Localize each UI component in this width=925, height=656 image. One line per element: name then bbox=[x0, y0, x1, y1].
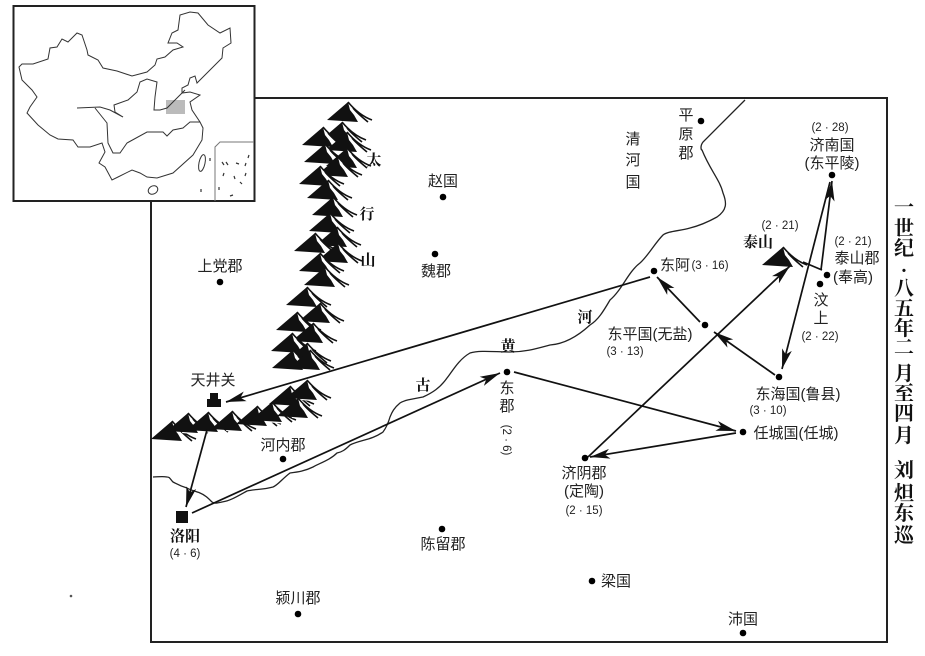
side title: 纪 bbox=[894, 237, 914, 260]
side title: 月 bbox=[894, 424, 914, 447]
place: Mount Tai bbox=[743, 220, 799, 251]
place: Wei bbox=[421, 251, 451, 280]
place: Dongjun: 郡 bbox=[499, 398, 515, 415]
place: Henei bbox=[260, 437, 306, 462]
mountain label: Taihang: 山 bbox=[360, 252, 376, 269]
place: Pei: 沛国 bbox=[728, 611, 758, 628]
arrow: Jiyin to Taishan bbox=[588, 266, 790, 457]
place: Dongjun bbox=[499, 369, 515, 456]
South China Sea islands bbox=[201, 155, 249, 196]
river label: ancient Yellow River: 黄 bbox=[500, 337, 517, 355]
mountain range: Taihang bbox=[271, 102, 372, 372]
mountain: Taishan bbox=[762, 247, 807, 269]
place: Mount Tai: (2 · 21) bbox=[761, 220, 799, 232]
side title: 世 bbox=[894, 217, 914, 240]
place: Dong'e: (3 · 16) bbox=[691, 260, 729, 272]
place: Qinghe bbox=[625, 131, 641, 191]
arrow: Tianjing Pass to Luoyang bbox=[186, 430, 207, 507]
side title: 二 bbox=[894, 337, 914, 359]
arrow: Wenshang to Jinan bbox=[821, 181, 832, 270]
place: Jinan: 济南国 bbox=[809, 137, 855, 154]
place: Qinghe: 国 bbox=[625, 174, 641, 191]
place: Wenshang bbox=[801, 281, 839, 343]
mountain range: southern Taihang bbox=[151, 380, 331, 443]
place: Taishan Commandery: (奉高) bbox=[833, 268, 873, 286]
river label: ancient Yellow River: 河 bbox=[577, 309, 593, 326]
place: Jiyin: 济阴郡 bbox=[561, 465, 607, 482]
place: Dongping bbox=[606, 322, 708, 358]
place: Yingchuan bbox=[275, 590, 321, 617]
place: Wenshang: 上 bbox=[813, 310, 829, 327]
side title: 五 bbox=[894, 298, 914, 320]
place: Pingyuan bbox=[678, 107, 704, 162]
place: Dongjun: (2 · 6) bbox=[500, 425, 512, 456]
side title: 年 bbox=[894, 316, 914, 340]
place: Henei: 河内郡 bbox=[260, 437, 306, 454]
arrow: Dongping to Dong'e bbox=[657, 277, 700, 322]
river label: ancient Yellow River bbox=[415, 309, 593, 394]
place: Dongping: 东平国(无盐) bbox=[608, 326, 692, 343]
side title: 炟 bbox=[893, 482, 914, 505]
side title: 东 bbox=[894, 502, 916, 525]
Yellow River bbox=[77, 79, 185, 117]
place: Taishan Commandery: (2 · 21) bbox=[834, 236, 872, 248]
place: Chenliu bbox=[420, 526, 466, 553]
China outline bbox=[19, 12, 231, 180]
place: Taishan Commandery bbox=[824, 236, 880, 286]
route arrows bbox=[186, 181, 832, 513]
Yangtze River bbox=[95, 108, 200, 153]
arrow: Dongjun to Rencheng bbox=[514, 372, 736, 431]
place: Luoyang: (4 · 6) bbox=[170, 548, 201, 560]
arrow: Taishan to Wenshang bbox=[803, 262, 822, 270]
place: Jiyin bbox=[561, 455, 607, 517]
place: Rencheng: 任城国(任城) bbox=[754, 425, 838, 442]
place: Pingyuan: 郡 bbox=[678, 145, 694, 162]
mountain label: Taihang: 行 bbox=[359, 206, 375, 223]
arrow: Dong'e to Tianjing Pass bbox=[226, 277, 650, 402]
place: Pingyuan: 原 bbox=[678, 126, 694, 143]
place: Luoyang: 洛阳 bbox=[170, 527, 200, 545]
side title: 月 bbox=[894, 362, 914, 385]
side title: 至 bbox=[894, 382, 914, 405]
place: Qinghe: 河 bbox=[625, 152, 641, 169]
place: Zhao: 赵国 bbox=[428, 173, 458, 190]
panel: main map frame bbox=[151, 98, 887, 642]
Hainan bbox=[147, 184, 159, 196]
arrow: Jinan to Donghai bbox=[782, 182, 830, 369]
place: Dong'e bbox=[651, 257, 729, 274]
place: Zhao bbox=[428, 173, 458, 200]
place: Yingchuan: 颍川郡 bbox=[275, 590, 321, 607]
mountain label: Taihang: 太 bbox=[366, 152, 382, 169]
place: Qinghe: 清 bbox=[625, 131, 641, 148]
place: Wei: 魏郡 bbox=[421, 263, 451, 280]
place: Wenshang: 汶 bbox=[813, 291, 829, 309]
side title: 四 bbox=[894, 403, 914, 425]
study area highlight bbox=[166, 100, 185, 114]
place: Dongjun: 东 bbox=[499, 380, 515, 397]
side title: 八 bbox=[894, 278, 914, 300]
place: Jinan bbox=[804, 122, 860, 178]
mountain label: Taihang bbox=[359, 152, 382, 269]
ancient Yellow River bbox=[153, 100, 745, 503]
side title: · bbox=[901, 260, 907, 282]
side title: 刘 bbox=[894, 458, 914, 482]
Taiwan bbox=[197, 154, 207, 172]
place: Jiyin: (定陶) bbox=[564, 483, 604, 500]
place: Pingyuan: 平 bbox=[678, 107, 694, 124]
South China Sea box bbox=[215, 142, 254, 201]
place: Wenshang: (2 · 22) bbox=[801, 331, 839, 343]
place: Jinan: (2 · 28) bbox=[811, 122, 849, 134]
side title: 巡 bbox=[894, 524, 916, 547]
place: Jinan: (东平陵) bbox=[804, 155, 860, 172]
arrow: Rencheng to Jiyin bbox=[590, 433, 736, 457]
panel: China locator inset bbox=[14, 6, 254, 201]
arrow: Donghai to Dongping bbox=[714, 332, 775, 375]
place: Jiyin: (2 · 15) bbox=[565, 505, 603, 517]
place: Pei bbox=[728, 611, 758, 636]
place: Tianjing Pass bbox=[190, 372, 236, 407]
place: Tianjing Pass: 天井关 bbox=[190, 372, 236, 389]
place: Donghai: 东海国(鲁县) bbox=[756, 386, 840, 403]
place: Donghai bbox=[749, 374, 840, 417]
place: Taishan Commandery: 泰山郡 bbox=[834, 250, 880, 267]
place: Liang: 梁国 bbox=[601, 573, 631, 590]
arrow: Luoyang to Dongjun bbox=[192, 373, 500, 513]
speck bbox=[70, 595, 72, 597]
river label: ancient Yellow River: 古 bbox=[415, 376, 431, 394]
place: Donghai: (3 · 10) bbox=[749, 405, 787, 417]
place: Mount Tai: 泰山 bbox=[743, 233, 773, 251]
place: Shangdang: 上党郡 bbox=[197, 258, 243, 275]
place: Dongping: (3 · 13) bbox=[606, 346, 644, 358]
place: Chenliu: 陈留郡 bbox=[420, 535, 466, 553]
place: Dong'e: 东阿 bbox=[660, 257, 690, 274]
place: Shangdang bbox=[197, 258, 243, 285]
side title: 一 bbox=[894, 197, 914, 219]
place: Luoyang bbox=[170, 511, 201, 560]
